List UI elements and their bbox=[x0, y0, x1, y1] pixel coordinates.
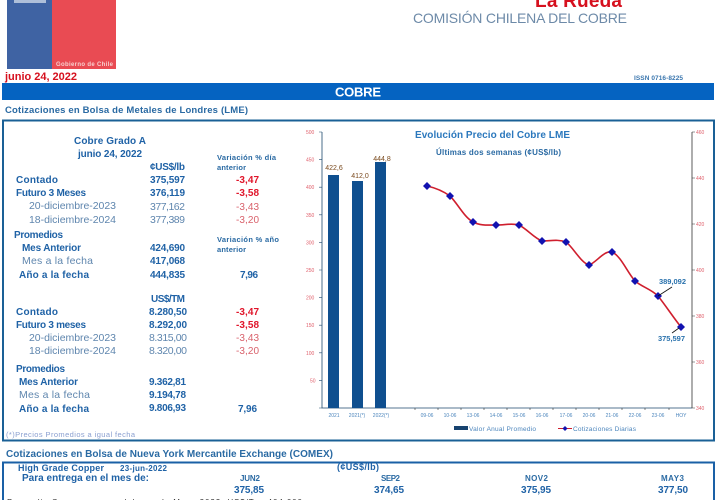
footnote: (*)Precios Promedios a igual fecha bbox=[6, 430, 136, 439]
callout: 375,597 bbox=[658, 328, 685, 343]
price table: 8.315,00 bbox=[149, 332, 187, 344]
bar chart: annual average: 2021 bbox=[328, 413, 340, 419]
line chart: daily quotes bbox=[415, 130, 705, 419]
price table: -3,20 bbox=[236, 346, 259, 357]
COMEX column: SEP2: SEP2 bbox=[381, 474, 401, 483]
bar chart: annual average: 450 bbox=[306, 158, 315, 164]
COMEX column: JUN2 bbox=[234, 474, 264, 496]
line chart: daily quotes: HOY bbox=[676, 413, 687, 419]
price table: 7,96 bbox=[238, 404, 257, 415]
bar chart: annual average: 200 bbox=[306, 296, 315, 302]
line chart: daily quotes: 15-06 bbox=[513, 413, 526, 419]
price table: -3,20 bbox=[236, 215, 259, 226]
price table: 20-diciembre-2023 bbox=[29, 332, 116, 344]
line chart: daily quotes: 420 bbox=[696, 222, 705, 228]
bar chart: annual average: 300 bbox=[306, 240, 315, 246]
line chart: daily quotes: 340 bbox=[696, 406, 705, 412]
line chart: daily quotes: 440 bbox=[696, 176, 705, 182]
price table: Variación % día bbox=[217, 153, 277, 162]
COMEX column: NOV2: 375,95 bbox=[521, 485, 551, 496]
bar chart: annual average: 412,0 bbox=[351, 173, 369, 180]
line chart: daily quotes: 22-06 bbox=[629, 413, 642, 419]
price table: -3,43 bbox=[236, 333, 259, 344]
line chart: daily quotes: 400 bbox=[696, 268, 705, 274]
price table bbox=[14, 136, 279, 415]
legend bbox=[454, 426, 637, 433]
line chart: daily quotes: 460 bbox=[696, 130, 705, 136]
banner: COBRE: COBRE bbox=[335, 84, 381, 100]
price table: 424,690 bbox=[150, 243, 185, 254]
bar chart: annual average bbox=[306, 130, 692, 419]
line chart: daily quotes: 17-06 bbox=[560, 413, 573, 419]
price table: 18-diciembre-2024 bbox=[29, 345, 116, 357]
price table: -3,58 bbox=[236, 320, 259, 331]
price table: Contado bbox=[16, 307, 58, 318]
bar chart: annual average: 500 bbox=[306, 130, 315, 136]
price table: Año a la fecha bbox=[19, 270, 89, 281]
price table: ¢US$/lb bbox=[150, 162, 185, 173]
ISSN: ISSN 0716-8225 bbox=[634, 75, 683, 82]
price table: 444,835 bbox=[150, 270, 185, 281]
COMEX column: NOV2: NOV2 bbox=[525, 474, 549, 483]
price table: Mes a la fecha bbox=[19, 389, 90, 401]
price table: US$/TM bbox=[151, 294, 185, 305]
bar chart: annual average: 2022(*) bbox=[373, 413, 390, 419]
price table: Cobre Grado A bbox=[74, 136, 146, 147]
price table: anterior bbox=[217, 245, 246, 254]
price table: 417,068 bbox=[150, 256, 185, 267]
line chart: daily quotes: 20-06 bbox=[583, 413, 596, 419]
price table: Promedios bbox=[14, 230, 63, 241]
callout: 375,597: 375,597 bbox=[658, 334, 685, 343]
line chart: daily quotes: 23-06 bbox=[652, 413, 665, 419]
price table: Variación % año bbox=[217, 235, 279, 244]
logo: Gobierno de Chile bbox=[7, 0, 116, 69]
price table: Futuro 3 meses bbox=[16, 320, 86, 331]
COMEX column: MAY3: 377,50 bbox=[658, 485, 688, 496]
price table: -3,47 bbox=[236, 307, 259, 318]
price table: 9.362,81 bbox=[149, 377, 186, 388]
price table: Contado bbox=[16, 175, 58, 186]
price table: Futuro 3 Meses bbox=[16, 188, 86, 199]
panel: COMEX: 23-jun-2022 bbox=[120, 464, 168, 473]
price table: 377,162 bbox=[150, 201, 185, 213]
price table: -3,43 bbox=[236, 202, 259, 213]
line chart: daily quotes: 380 bbox=[696, 314, 705, 320]
COMEX labels: High Grade Copper bbox=[18, 463, 104, 473]
line chart: daily quotes: 21-06 bbox=[606, 413, 619, 419]
price table: 18-diciembre-2024 bbox=[29, 214, 116, 226]
price table: 9.806,93 bbox=[149, 403, 186, 414]
price table: anterior bbox=[217, 163, 246, 172]
price table: 9.194,78 bbox=[149, 390, 186, 401]
line chart: daily quotes: 16-06 bbox=[536, 413, 549, 419]
COMEX column: NOV2 bbox=[521, 474, 551, 496]
line chart: daily quotes: 14-06 bbox=[490, 413, 503, 419]
price table: 376,119 bbox=[150, 188, 185, 199]
panel: COMEX: (¢US$/lb) bbox=[337, 462, 379, 472]
price table: 377,389 bbox=[150, 214, 185, 226]
legend: Valor Anual Promedio bbox=[469, 426, 536, 433]
bar chart: annual average: 150 bbox=[306, 323, 315, 329]
line chart: daily quotes: 09-06 bbox=[421, 413, 434, 419]
bar chart: annual average: 2021(*) bbox=[349, 413, 366, 419]
line chart: daily quotes: 13-06 bbox=[467, 413, 480, 419]
COMEX column: SEP2 bbox=[374, 474, 404, 496]
bar chart: annual average: 250 bbox=[306, 268, 315, 274]
bar chart: annual average: 50 bbox=[310, 378, 316, 384]
price table: -3,47 bbox=[236, 175, 259, 186]
price table: 375,597 bbox=[150, 175, 185, 186]
COMEX column: JUN2: 375,85 bbox=[234, 485, 264, 496]
line chart: daily quotes: 360 bbox=[696, 360, 705, 366]
price table: Mes Anterior bbox=[19, 377, 78, 388]
price table: 7,96 bbox=[240, 270, 258, 281]
price table: junio 24, 2022 bbox=[77, 149, 142, 160]
line chart: daily quotes: 10-06 bbox=[444, 413, 457, 419]
price table: 20-diciembre-2023 bbox=[29, 200, 116, 212]
bar chart: annual average: 100 bbox=[306, 351, 315, 357]
price table: 8.292,00 bbox=[149, 320, 187, 331]
subtitle: Comisión Chilena del Cobre: COMISIÓN CHILENA DEL COBRE bbox=[413, 10, 627, 26]
bar chart: annual average: 350 bbox=[306, 213, 315, 219]
COMEX column: MAY3: MAY3 bbox=[661, 474, 685, 483]
price table: Año a la fecha bbox=[19, 404, 89, 415]
legend: Cotizaciones Diarias bbox=[573, 426, 637, 433]
heading: COMEX: Cotizaciones en Bolsa de Nueva York Mercantile Exchange (COMEX) bbox=[6, 449, 333, 460]
banner: COBRE bbox=[2, 83, 714, 100]
price table: 8.320,00 bbox=[149, 345, 187, 357]
heading: LME: Cotizaciones en Bolsa de Metales de Londres (LME) bbox=[5, 105, 248, 116]
panel: COMEX: Para entrega en el mes de: bbox=[22, 473, 149, 484]
bar chart: annual average: 444,8 bbox=[373, 156, 391, 163]
COMEX column: JUN2: JUN2 bbox=[240, 474, 261, 483]
date: junio 24, 2022 bbox=[4, 71, 77, 83]
price table: Mes a la fecha bbox=[22, 255, 93, 267]
callout: 389,092 bbox=[658, 277, 686, 296]
panel: COMEX bbox=[3, 462, 714, 500]
bar chart: annual average: 400 bbox=[306, 185, 315, 191]
bar chart: annual average: 422,6 bbox=[325, 165, 343, 172]
price table: 8.280,50 bbox=[149, 307, 187, 318]
chart heading: Evolución Precio del Cobre LME bbox=[415, 130, 570, 141]
chart subtitle: Últimas dos semanas (¢US$/lb) bbox=[436, 148, 561, 157]
price table: -3,58 bbox=[236, 188, 259, 199]
callout: 389,092: 389,092 bbox=[659, 277, 686, 286]
panel: LME bbox=[3, 120, 714, 440]
COMEX column: SEP2: 374,65 bbox=[374, 485, 404, 496]
logo: Gobierno de Chile: Gobierno de Chile bbox=[56, 62, 114, 68]
COMEX column: MAY3 bbox=[658, 474, 688, 496]
price table: Promedios bbox=[16, 364, 65, 375]
price table: Mes Anterior bbox=[22, 243, 81, 254]
